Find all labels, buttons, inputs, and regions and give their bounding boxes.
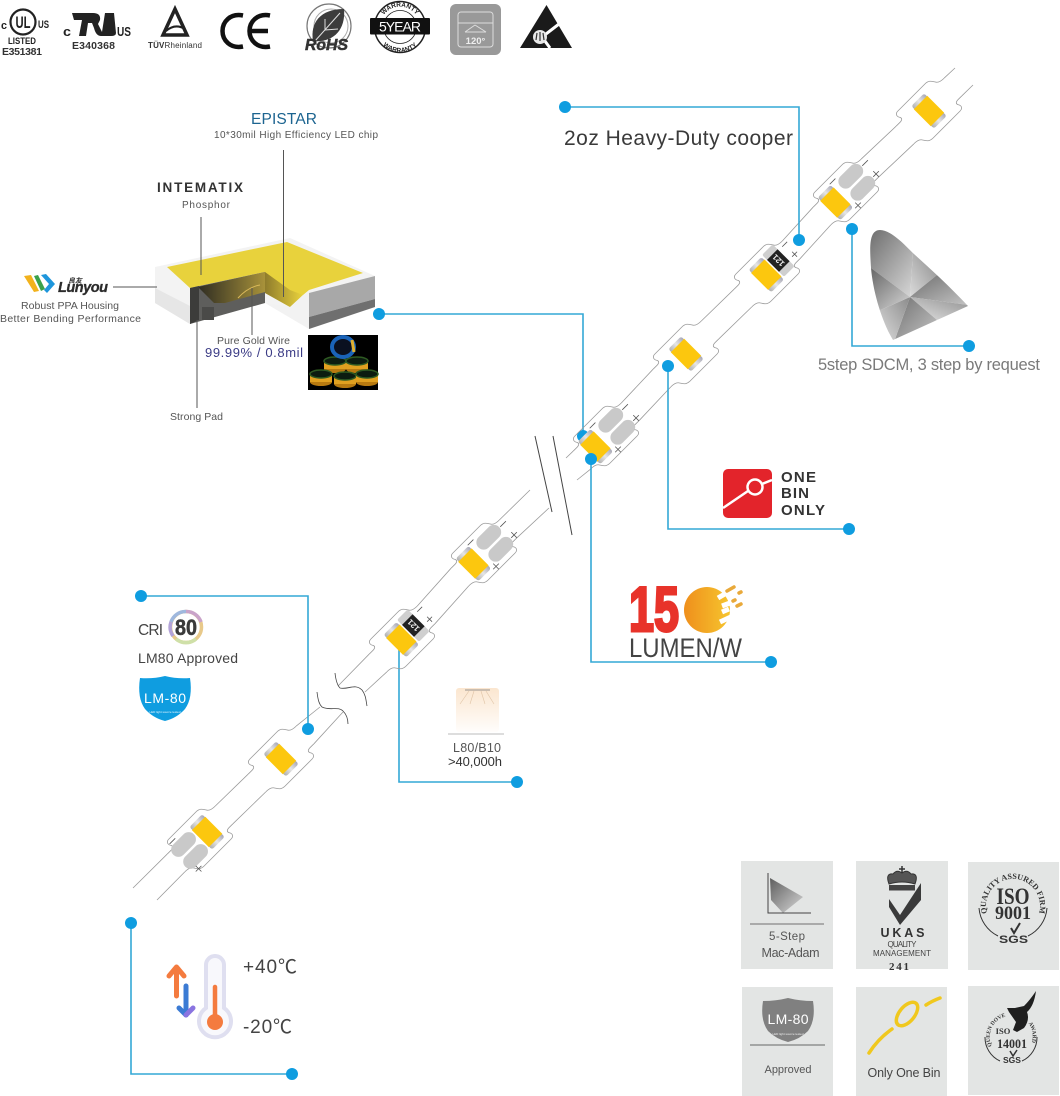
certification: recognized component: c [63,24,71,39]
callout line: PPA package to strip [373,308,589,442]
tile: ISO 14001: 14001 [997,1036,1027,1051]
callout line: SDCM [846,223,975,352]
icon: temperature arrows [169,967,193,1015]
label: Intematix phosphor: INTEMATIX [157,180,243,195]
logo: Lunyou housing supplier: Lunyou [58,280,108,296]
tile: UKAS quality management [856,861,948,973]
label: gold wire: 99.99% / 0.8mil [205,345,303,360]
icon: 120 degree beam angle: 120° [466,36,486,47]
tile: LM-80 approved: Approved [764,1064,812,1076]
callout line: L80 lifetime [399,650,523,788]
badge: CRI 80 [138,611,202,643]
strip module G: LED with resistor [362,597,444,679]
photo: gold wire spools [308,335,378,390]
label: Epistar chip [214,111,378,297]
text: one bin only: ONLY [781,502,825,519]
chart: SDCM chromaticity fan [870,230,968,340]
tile: ISO 14001: AWARD [1028,1022,1036,1043]
certification: CE mark [222,15,270,47]
tile: only one bin [856,987,947,1096]
strip module I: LED with solder pads [160,799,241,880]
tile: ISO 9001: QUALITY ASSURED FIRM [980,874,1046,914]
certification: 5 year warranty [370,0,430,54]
label: strong pad: Strong Pad [170,411,223,423]
label: housing description [0,287,157,325]
tile: 5-step Mac-Adam: Mac-Adam [762,946,820,960]
callout line: temperature [125,917,298,1080]
text: L80 lifetime: >40,000h [448,754,502,769]
LED package cross section [155,238,375,329]
certification: UL listed: UL [16,13,30,32]
tile: LM-80 approved: LED light source tested [772,1032,804,1036]
tile: ISO 14001: SGS [1003,1056,1022,1065]
certification: RoHS leaf [305,4,351,54]
icon: one bin only [723,469,772,518]
certification: recognized component [63,13,131,52]
strip break marks: wavy [317,673,367,724]
callout line: one bin [662,360,855,535]
text: SDCM: 5step SDCM, 3 step by request [818,356,1040,374]
text: LM80 approved: LM80 Approved [138,650,238,666]
icon: thermometer [199,956,231,1037]
badge: LM-80 shield blue: LM-80 [144,690,186,706]
logo: Lunyou housing supplier [24,274,108,296]
label: Epistar chip: EPISTAR [251,111,317,128]
certification: RoHS leaf: RoHS [305,37,349,54]
heading: copper: 2oz Heavy-Duty cooper [564,127,793,150]
tile: ISO 9001: ISO [996,884,1030,909]
icon: L80 lamp tile [448,688,504,734]
certification: UL listed: LISTED [8,36,36,47]
icon: 120 degree beam angle [450,4,501,55]
text: temperature range: +40℃ [243,957,297,978]
strip break marks: straight [535,436,572,535]
label: strong pad [170,320,223,423]
label: housing description: Robust PPA Housing [21,300,119,312]
tile: ISO 14001: QUEEN DOVE [986,1013,1006,1047]
certification: recognized component: E340368 [72,40,115,52]
strip module H: LED [241,719,321,799]
logo: Lunyou housing supplier: 良友 [68,276,83,285]
tile: UKAS quality management: QUALITY [888,940,917,949]
label: gold wire [205,288,303,360]
badge: LM-80 shield blue: LED light source tested [149,710,181,714]
tile: ISO 9001: SGS [999,934,1028,946]
callout line: CRI [135,590,314,735]
badge: CRI 80: CRI [138,622,163,639]
text: L80 lifetime: L80/B10 [453,741,501,755]
certification: UL listed: US [38,19,49,31]
strip module A: LED [889,71,969,151]
badge: LM-80 shield blue [139,676,191,721]
text: temperature range: -20℃ [243,1017,292,1038]
certification: 5 year warranty: WARRANTY [384,42,416,52]
certification: 5 year warranty: 5YEAR [379,18,421,34]
label: Epistar chip: 10*30mil High Efficiency LED chip [214,130,378,141]
certification: UL listed [1,10,49,58]
strip module F: LED with solder pads [444,511,526,593]
strip module E: LED with solder pads [566,394,648,476]
callout line: copper [559,101,805,246]
certification: UL listed: E351381 [2,46,42,58]
badge: 150 lumen per watt: LUMEN/W [629,633,742,663]
text: L80 lifetime [448,741,502,769]
LED strip edges [133,68,973,900]
icon: ESD warning triangle [520,5,572,48]
tile: UKAS quality management: MANAGEMENT [873,949,931,958]
tile: UKAS quality management: UKAS [880,926,924,940]
tile: ISO 14001: ISO [996,1026,1011,1036]
tile: 5-step Mac-Adam: 5-Step [769,931,805,943]
strip module C: LED with resistor [727,232,809,314]
tile: 5-step Mac-Adam [741,861,833,969]
text: one bin only [781,469,825,519]
tile: LM-80 approved: LM-80 [768,1011,809,1027]
label: Intematix phosphor [157,180,243,275]
certification: UL listed: c [1,20,7,32]
tile: only one bin: Only One Bin [868,1066,941,1080]
label: gold wire: Pure Gold Wire [217,335,290,347]
tile: LM-80 approved [742,987,833,1096]
label: Intematix phosphor: Phosphor [182,200,231,211]
strip module B: LED with solder pads [806,150,888,232]
badge: CRI 80: 80 [175,615,197,640]
strip module D: LED [646,314,726,394]
label: housing description: Better Bending Performance [0,313,141,325]
certification: TUV Rheinland [148,9,202,50]
tile: ISO 9001: 9001 [995,903,1031,924]
tile: UKAS quality management: 241 [889,961,909,973]
certification: TUV Rheinland: TÜVRheinland [148,41,202,50]
certification: recognized component: US [117,24,131,39]
badge: 150 lumen per watt [629,575,742,663]
text: one bin only: ONE [781,469,816,486]
tile: ISO 9001 [968,862,1059,970]
text: one bin only: BIN [781,485,809,502]
text: temperature range [243,957,297,1038]
certification: 5 year warranty: WARRANTY [380,2,420,14]
callout line: lumen [585,453,777,668]
tile: ISO 14001 [968,986,1059,1095]
badge: 150 lumen per watt: 15 [629,575,679,645]
